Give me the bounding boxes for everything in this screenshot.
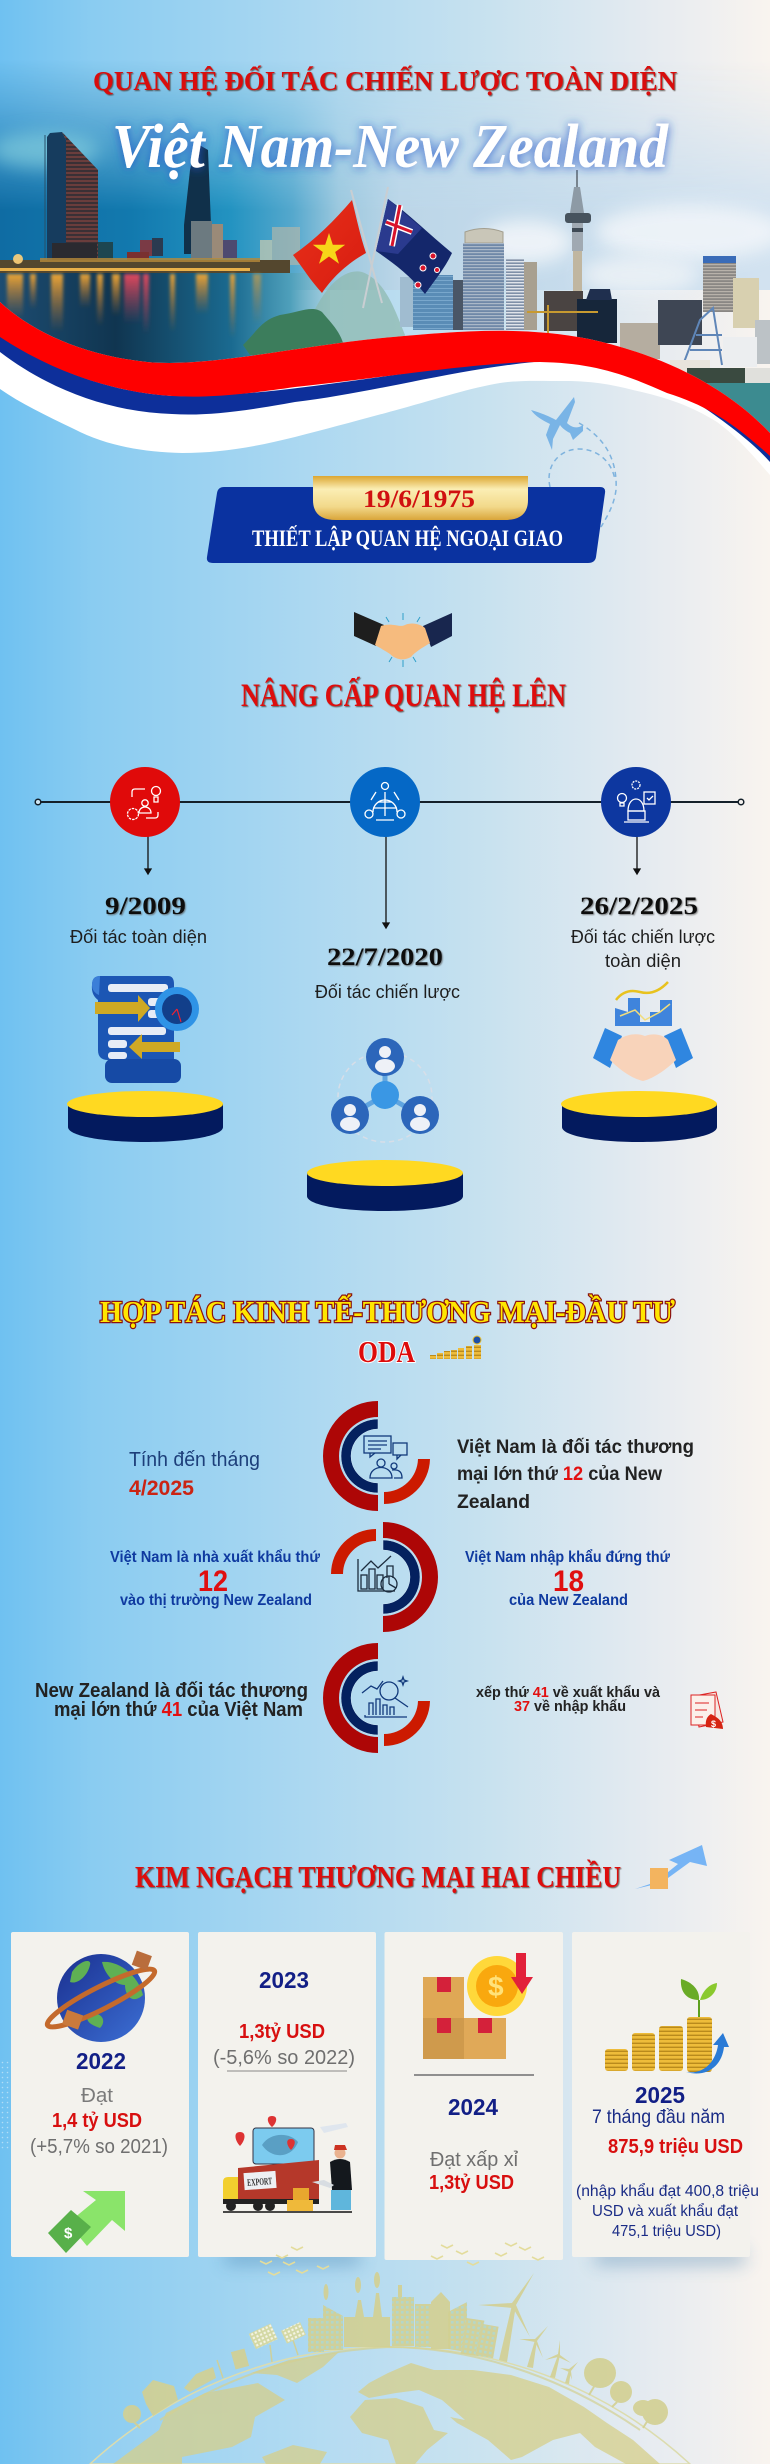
icon: globe with cargo xyxy=(43,1951,159,2042)
date: 22/7/2020 xyxy=(327,944,443,971)
icon: export truck: EXPORT xyxy=(247,2176,273,2189)
icon: chat and people xyxy=(364,1436,407,1478)
change: (-5,6% so 2022) xyxy=(213,2047,355,2069)
heading: upgrade: NÂNG CẤP QUAN HỆ LÊN xyxy=(241,675,566,714)
icon: handshake xyxy=(354,612,452,667)
text: first 7 months: 7 tháng đầu năm xyxy=(592,2107,725,2128)
row 3: NZ rank xyxy=(35,1643,723,1753)
icon: boxes with falling coin xyxy=(423,1953,533,2059)
row 1: trade partner xyxy=(129,1401,694,1513)
title: QUAN HỆ ĐỐI TÁC CHIẾN LƯỢC TOÀN DIỆN xyxy=(93,65,677,96)
text: exporter rank: Việt Nam là nhà xuất khẩu thứ xyxy=(110,1549,321,1566)
value: 1,3tỷ USD xyxy=(239,2021,325,2043)
bottom art: earth with green city xyxy=(90,2272,690,2464)
card: 2024 xyxy=(384,1932,563,2260)
icon: rising coins xyxy=(430,1336,481,1359)
label: Đối tác chiến lược xyxy=(571,927,715,947)
main title script: Việt Nam-New Zealand xyxy=(112,113,669,181)
text: importer rank xyxy=(465,1549,671,1609)
milestone 2: 22/7/2020 xyxy=(307,944,463,1211)
label: Đối tác toàn diện xyxy=(70,927,207,947)
solar panels xyxy=(249,2322,306,2349)
icon: coin stacks with sprout xyxy=(605,1979,729,2073)
breakdown: 475,1 triệu USD) xyxy=(612,2223,721,2240)
card: 2022 xyxy=(11,1932,189,2257)
label: Đối tác chiến lược xyxy=(315,982,460,1002)
icon: bar chart with pie xyxy=(358,1556,397,1592)
text: rank 41 and 37: 37 về nhập khẩu xyxy=(514,1698,626,1715)
arrow xyxy=(145,836,151,874)
icon: rising arrow xyxy=(635,1845,707,1889)
card shadows xyxy=(225,2250,745,2264)
left water with reflections xyxy=(0,273,330,373)
text: partner 12 xyxy=(457,1436,694,1513)
birds xyxy=(260,2243,544,2275)
text: rank 41 and 37 xyxy=(476,1684,661,1715)
rings xyxy=(323,1643,430,1753)
year: 2023 xyxy=(259,1967,309,1993)
sky backdrop xyxy=(0,60,770,295)
text: rank 41 and 37: xếp thứ 41 về xuất khẩu và xyxy=(476,1684,661,1701)
card: 2025 xyxy=(572,1932,759,2257)
rings xyxy=(323,1401,430,1511)
icon: scroll with clock xyxy=(92,976,199,1083)
icon: milestone 2020 xyxy=(350,767,420,837)
decorative dots xyxy=(0,2060,10,2150)
plate caption: THIẾT LẬP QUAN HỆ NGOẠI GIAO xyxy=(252,525,563,551)
text: partner 12: Việt Nam là đối tác thương xyxy=(457,1436,694,1458)
text: as of: 4/2025 xyxy=(129,1477,194,1500)
label line 2: toàn diện xyxy=(605,951,681,971)
icon: export truck xyxy=(223,2116,352,2212)
gold date tab xyxy=(313,476,528,520)
earth xyxy=(90,2347,690,2464)
icon: New Zealand flag xyxy=(376,199,452,294)
date plate xyxy=(207,476,605,563)
icon: document and money bag: $ xyxy=(711,1719,716,1729)
year: 2025 xyxy=(635,2082,685,2108)
wave ribbon xyxy=(0,302,770,475)
text: importer rank: của New Zealand xyxy=(509,1592,628,1609)
text: approx: Đạt xấp xỉ xyxy=(430,2149,519,2171)
breakdown: USD và xuất khẩu đạt xyxy=(592,2202,739,2220)
ground band xyxy=(160,2347,640,2430)
text: exporter rank: vào thị trường New Zealand xyxy=(120,1592,312,1609)
growth: (+5,7% so 2021) xyxy=(30,2136,168,2158)
Ha Long island xyxy=(243,271,405,355)
arrow xyxy=(634,836,640,874)
icon: magnifier with chart xyxy=(362,1677,408,1717)
icon: milestone 2009 xyxy=(110,767,180,837)
left skyline xyxy=(0,132,300,273)
rings xyxy=(331,1522,438,1632)
text: as of xyxy=(129,1449,260,1500)
date: 26/2/2025 xyxy=(580,893,698,920)
text: as of: Tính đến tháng xyxy=(129,1449,260,1471)
podium xyxy=(307,1160,463,1211)
right skyline xyxy=(400,170,770,433)
heading: economic cooperation: HỢP TÁC KINH TẾ-THƯƠNG MẠI-ĐẦU TƯ xyxy=(100,1293,675,1329)
value: 1,3tỷ USD xyxy=(429,2172,514,2194)
text: importer rank: Việt Nam nhập khẩu đứng thứ xyxy=(465,1549,671,1566)
hero image: twin skylines xyxy=(0,70,770,433)
icon: milestone 2025 xyxy=(601,767,671,837)
icon: flags xyxy=(293,187,452,308)
text: partner 41: New Zealand là đối tác thương xyxy=(35,1680,308,1702)
text: importer rank: 18 xyxy=(553,1565,584,1598)
breakdown xyxy=(576,2182,759,2240)
icon: airplane with dashed route xyxy=(531,397,616,527)
icon: money with arrow xyxy=(48,2191,125,2253)
icon: chart and handshake xyxy=(593,982,693,1081)
date: 9/2009 xyxy=(105,893,186,920)
arrow xyxy=(383,836,389,928)
text: exporter rank: 12 xyxy=(198,1565,228,1598)
podium xyxy=(561,1091,717,1142)
text: exporter rank xyxy=(110,1549,321,1609)
text: partner 12: mại lớn thứ 12 của New xyxy=(457,1463,663,1485)
text: partner 41: mại lớn thứ 41 của Việt Nam xyxy=(54,1699,303,1721)
text: reached: Đạt xyxy=(81,2085,113,2107)
card: 2023 xyxy=(198,1932,376,2257)
icon: Vietnam flag xyxy=(293,200,366,293)
podium xyxy=(67,1091,223,1142)
icon: money with arrow: $ xyxy=(64,2225,73,2242)
year: 2024 xyxy=(448,2094,498,2120)
icon: connected people xyxy=(331,1038,439,1142)
breakdown: (nhập khẩu đạt 400,8 triệu xyxy=(576,2182,759,2200)
timeline xyxy=(35,767,744,928)
icon: document and money bag xyxy=(691,1692,723,1729)
milestone 1: 9/2009 xyxy=(67,893,223,1142)
milestone 3: 26/2/2025 xyxy=(561,893,717,1142)
value: 875,9 triệu USD xyxy=(608,2136,743,2158)
row 2: export and import rank xyxy=(110,1522,671,1632)
text: partner 41 xyxy=(35,1680,308,1721)
value: 1,4 tỷ USD xyxy=(52,2110,142,2132)
text: partner 12: Zealand xyxy=(457,1491,530,1513)
year: 2022 xyxy=(76,2048,126,2074)
date: 19/6/1975 xyxy=(363,486,475,513)
continents xyxy=(113,2352,660,2464)
heading: ODA: ODA xyxy=(358,1334,416,1369)
city skyline xyxy=(123,2272,668,2430)
icon: boxes with falling coin: $ xyxy=(488,1971,504,2002)
heading: two-way trade: KIM NGẠCH THƯƠNG MẠI HAI CHIỀU xyxy=(135,1858,621,1894)
